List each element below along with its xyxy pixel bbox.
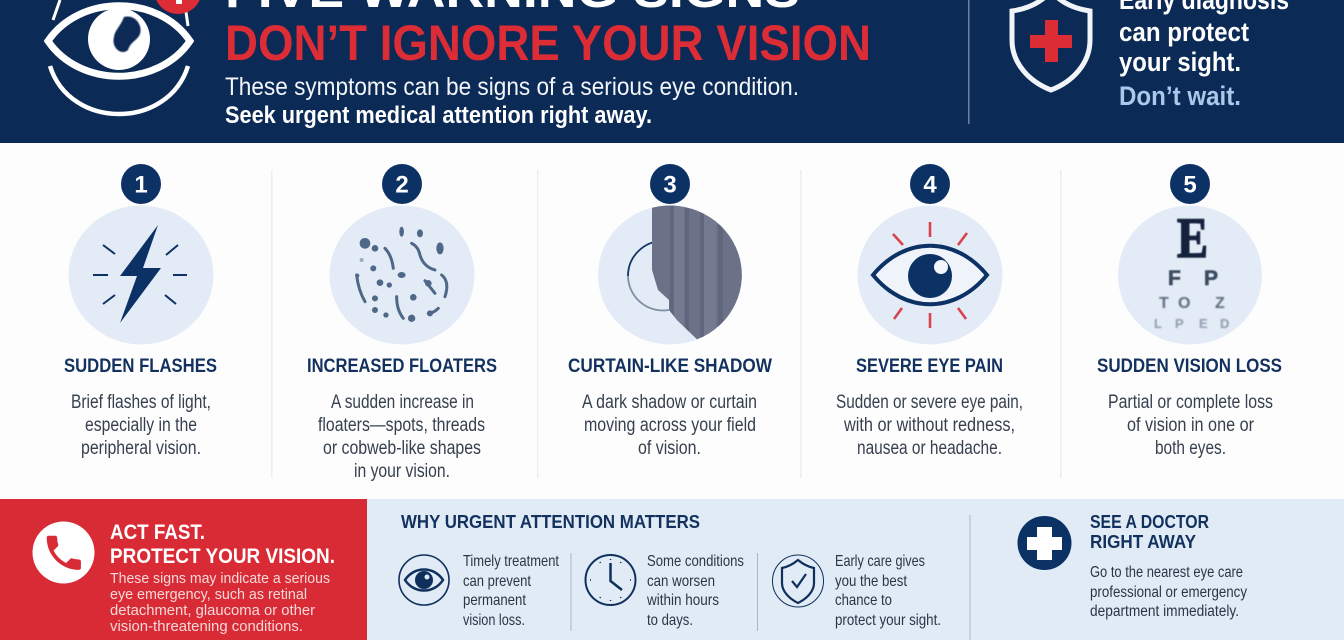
icon: medical plus [1018,516,1072,570]
panel: sign 4 severe eye pain [836,164,1023,459]
icon: clock [586,555,636,605]
title: DON’T IGNORE YOUR VISION [225,15,871,71]
text: Early care gives [835,553,925,570]
description: A sudden increase in [331,392,474,413]
description: or cobweb-like shapes [323,438,481,459]
description: Brief flashes of light, [71,392,211,413]
icon: curtain shadow over eye [598,206,742,344]
text [463,553,559,629]
callout: early diagnosis: can protect [1119,17,1249,47]
icon: blurred eye chart: E [1177,207,1208,270]
description [71,392,211,459]
text: can prevent [463,573,531,590]
callout: early diagnosis: your sight. [1119,47,1241,77]
icon: blurred eye chart: O [1178,295,1190,312]
text: you the best [835,573,907,590]
heading: ACT FAST. [110,521,205,544]
description: nausea or headache. [857,438,1002,459]
icon: eye with alert badge [48,0,202,114]
description: of vision in one or [1127,415,1255,436]
description: professional or emergency [1090,584,1247,601]
icon: lightning flash [68,206,214,344]
description: peripheral vision. [81,438,201,459]
icon: phone [32,522,94,584]
panel: sign 5 sudden vision loss [1097,164,1282,459]
icon: eye [399,555,449,605]
panel: header banner [0,0,1344,143]
icon: floaters [330,206,474,344]
description [1108,392,1273,459]
item: timely treatment [399,553,559,629]
panel: sign 1 sudden flashes [64,164,217,459]
description: moving across your field [584,415,756,436]
description: Partial or complete loss [1108,392,1273,413]
panel: act fast [0,499,367,640]
icon: shield with red cross [1012,0,1090,90]
text [835,553,941,629]
description: eye emergency, such as retinal [110,586,307,603]
description [836,392,1023,459]
description [110,570,330,635]
number badge 4: 4 [923,172,937,198]
heading [1090,512,1209,552]
heading [110,521,335,568]
description: Sudden or severe eye pain, [836,392,1023,413]
icon: blurred eye chart [1118,206,1262,344]
number badge 3: 3 [663,172,677,198]
text: can worsen [647,573,715,590]
description: vision-threatening conditions. [110,618,303,635]
text: chance to [835,592,892,609]
description: both eyes. [1155,438,1226,459]
heading: RIGHT AWAY [1090,532,1196,552]
number badge 2: 2 [395,172,409,198]
heading: SEE A DOCTOR [1090,512,1209,532]
heading: SUDDEN FLASHES [64,356,217,377]
number badge 3 [650,164,690,204]
number badge 2 [382,164,422,204]
heading: CURTAIN-LIKE SHADOW [568,356,772,377]
text: vision loss. [463,612,525,629]
panel: see a doctor [1018,512,1247,620]
icon: blurred eye chart: P [1204,267,1218,290]
text: to days. [647,612,693,629]
description: of vision. [638,438,701,459]
text: permanent [463,592,526,609]
item: conditions can worsen [586,553,744,629]
description [318,392,485,482]
icon: blurred eye chart: F [1168,267,1181,290]
icon: shield check [772,555,824,607]
text [646,553,744,629]
description: with or without redness, [843,415,1015,436]
number badge 4 [910,164,950,204]
number badge 1: 1 [134,172,148,198]
panel: why urgent attention matters [367,499,1344,640]
subtitle [225,73,799,129]
number badge 1 [121,164,161,204]
icon: blurred eye chart: T [1159,295,1169,312]
icon: blurred eye chart: D [1220,316,1229,331]
description: floaters—spots, threads [318,415,485,436]
text: protect your sight. [835,612,941,629]
heading: SUDDEN VISION LOSS [1097,356,1282,377]
description: A dark shadow or curtain [582,392,757,413]
description [582,392,757,459]
subtitle: Seek urgent medical attention right away. [225,102,652,129]
icon: blurred eye chart: L [1154,316,1162,331]
description: in your vision. [354,461,450,482]
description: detachment, glaucoma or other [110,602,315,619]
subtitle: These symptoms can be signs of a serious eye condition. [225,73,799,101]
description: Go to the nearest eye care [1090,564,1243,581]
description: department immediately. [1090,603,1239,620]
number badge 5 [1170,164,1210,204]
callout: early diagnosis [1119,0,1289,111]
icon: blurred eye chart: E [1199,316,1208,331]
heading: WHY URGENT ATTENTION MATTERS [401,512,700,532]
text: Timely treatment [463,553,559,570]
number badge 5: 5 [1183,172,1197,198]
heading: INCREASED FLOATERS [307,356,497,377]
callout: early diagnosis: Don’t wait. [1119,81,1241,111]
heading: SEVERE EYE PAIN [856,356,1003,377]
panel: sign 2 increased floaters [307,164,497,482]
description: especially in the [85,415,197,436]
panel: sign 3 curtain-like shadow [568,164,772,459]
heading: PROTECT YOUR VISION. [110,545,335,568]
text: Some conditions [647,553,744,570]
description: These signs may indicate a serious [110,570,330,587]
description [1090,564,1247,620]
icon: eye with pain rays [858,206,1002,344]
item: early care [772,553,941,629]
icon: blurred eye chart: Z [1215,295,1225,312]
icon: blurred eye chart: P [1175,316,1184,331]
text: within hours [646,592,719,609]
